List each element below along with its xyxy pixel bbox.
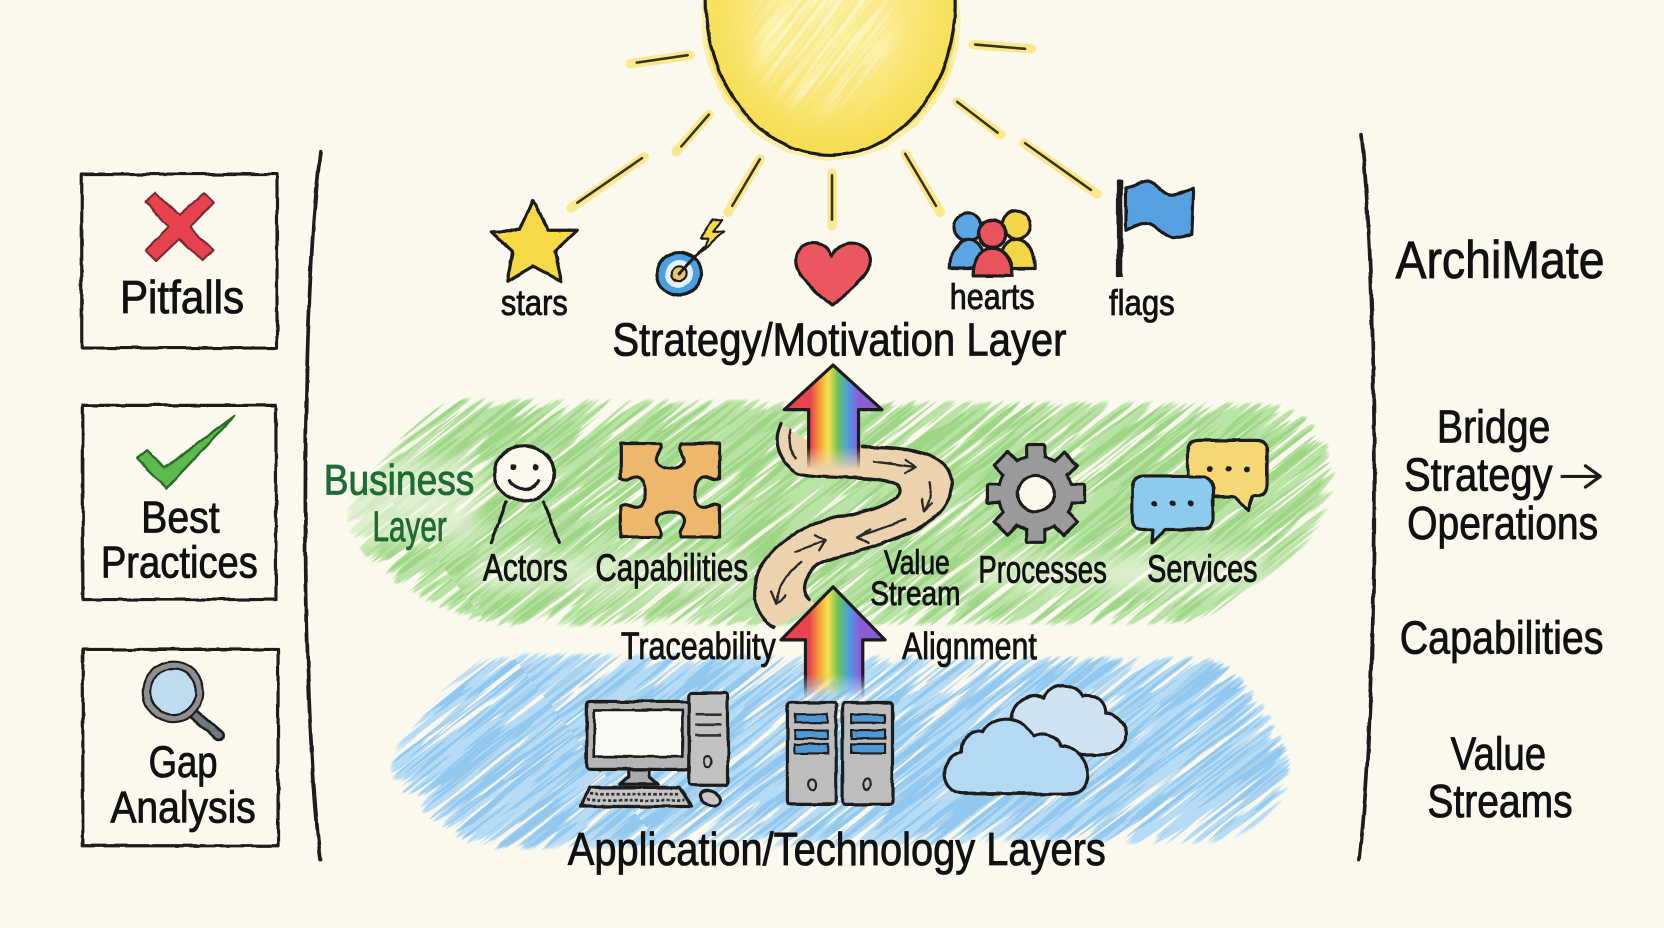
icon: flag (1120, 180, 1194, 277)
business layer label: Business (324, 457, 474, 504)
top rainbow arrow (784, 365, 882, 469)
icon: green check (137, 416, 235, 488)
label: Alignment: Alignment (902, 625, 1037, 668)
right column: Value Streams (1427, 727, 1573, 827)
icon: desktop computer (581, 693, 728, 809)
blue technology layer band (390, 652, 1292, 850)
label: Gap Analysis: Analysis (110, 783, 256, 832)
right column: Bridge Strategy to Operations: Strategy (1404, 448, 1553, 500)
panel: Best Practices (83, 405, 276, 600)
icon: speech bubbles (1132, 440, 1267, 543)
panel: Gap Analysis (83, 649, 278, 846)
right column: Bridge Strategy to Operations (1404, 401, 1600, 549)
bottom rainbow arrow (781, 587, 885, 698)
right column: Capabilities: Capabilities (1400, 612, 1603, 664)
label: stars: stars (501, 282, 568, 323)
label: Best Practices (101, 494, 258, 587)
label: hearts: hearts (950, 276, 1035, 317)
heading: Application/Technology Layers: Application/Technology Layers (568, 823, 1106, 875)
right column: Bridge Strategy to Operations: Operations (1407, 497, 1598, 549)
right divider (1359, 135, 1374, 860)
label: Gap Analysis (110, 738, 256, 832)
right column: Value Streams: Value (1451, 727, 1546, 779)
label: Actors: Actors (483, 546, 568, 589)
right column: Bridge Strategy to Operations: Bridge (1437, 401, 1550, 453)
icon: heart (796, 243, 870, 306)
icon: people group (950, 211, 1035, 276)
icon: target with lightning (657, 220, 724, 295)
label: Capabilities: Capabilities (595, 546, 748, 589)
icon: server racks (787, 702, 892, 804)
icon: puzzle piece (621, 444, 720, 537)
label: Gap Analysis: Gap (149, 738, 218, 787)
business layer label (324, 457, 474, 550)
label: Pitfalls: Pitfalls (120, 271, 244, 323)
label: Processes: Processes (978, 549, 1107, 592)
icon: star (491, 201, 577, 281)
business layer label: Layer (373, 503, 447, 550)
label: Value Stream (870, 544, 960, 613)
left divider (305, 152, 321, 860)
value stream road (755, 423, 952, 627)
label: Value Stream: Value (884, 544, 950, 582)
label: Traceability: Traceability (621, 625, 776, 668)
label halos (318, 462, 1268, 875)
label: Services: Services (1147, 548, 1258, 591)
sun (701, 0, 960, 160)
icon: actor (491, 446, 559, 542)
icon: gear (987, 445, 1085, 542)
icon: clouds (944, 685, 1126, 794)
right column: Value Streams: Streams (1427, 775, 1573, 827)
label: flags: flags (1109, 282, 1175, 323)
green business layer band (346, 397, 1336, 628)
right column: ArchiMate: ArchiMate (1395, 231, 1605, 290)
label: Value Stream: Stream (870, 575, 960, 613)
panel: Pitfalls (82, 174, 277, 348)
icon: magnifier (146, 665, 219, 735)
sun rays (571, 45, 1097, 226)
label: Best Practices: Practices (101, 538, 258, 587)
heading: Strategy/Motivation Layer: Strategy/Motivation Layer (612, 313, 1067, 365)
label: Best Practices: Best (141, 494, 220, 543)
icon: red cross (145, 193, 213, 261)
